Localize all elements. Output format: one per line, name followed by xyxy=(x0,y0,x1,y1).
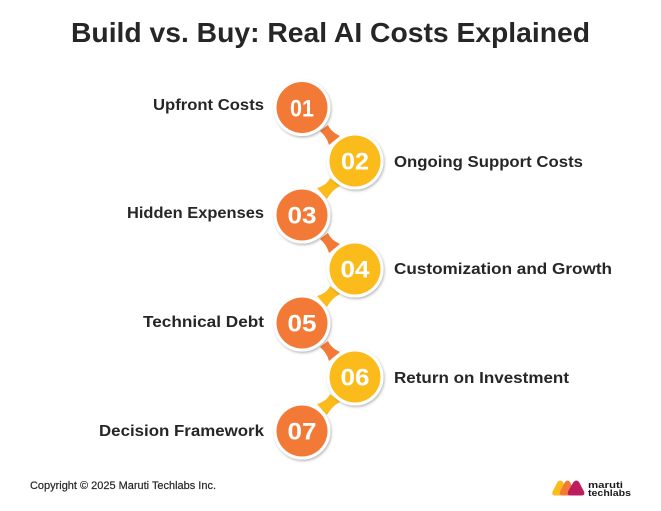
connector: 06 to 07 xyxy=(317,394,340,415)
step 06: 06 xyxy=(340,364,370,392)
step 07: 07 xyxy=(288,418,316,446)
step 01: 01 xyxy=(290,96,314,122)
step 04: 04 xyxy=(340,256,370,284)
connector: 01 to 02 xyxy=(320,125,340,145)
step 04 xyxy=(326,240,612,298)
connector: 05 to 06 xyxy=(320,341,340,361)
step 03 xyxy=(127,186,330,244)
connector: 04 to 05 xyxy=(317,286,340,307)
step 03: Hidden Expenses xyxy=(127,205,264,222)
logo: maruti xyxy=(588,480,623,491)
logo: techlabs xyxy=(588,488,631,499)
connector: 02 to 03 xyxy=(317,178,340,199)
step 05: Technical Debt xyxy=(143,314,264,331)
step 01 xyxy=(153,79,330,136)
title: Build vs. Buy: Real AI Costs Explained xyxy=(71,17,590,48)
step 04: Customization and Growth xyxy=(394,261,612,278)
step 02: Ongoing Support Costs xyxy=(394,154,583,171)
step 03: 03 xyxy=(288,202,316,230)
step 01: Upfront Costs xyxy=(153,97,264,114)
step 06 xyxy=(326,348,569,406)
step 02: 02 xyxy=(341,148,369,176)
connector: 03 to 04 xyxy=(320,233,340,253)
step 06: Return on Investment xyxy=(394,370,569,387)
logo xyxy=(552,480,631,499)
step 02 xyxy=(326,132,583,190)
copyright: Copyright © 2025 Maruti Techlabs Inc. xyxy=(30,480,216,492)
step 07: Decision Framework xyxy=(99,423,264,440)
step 05: 05 xyxy=(288,310,316,338)
step 07 xyxy=(99,402,330,460)
step 05 xyxy=(143,294,330,352)
